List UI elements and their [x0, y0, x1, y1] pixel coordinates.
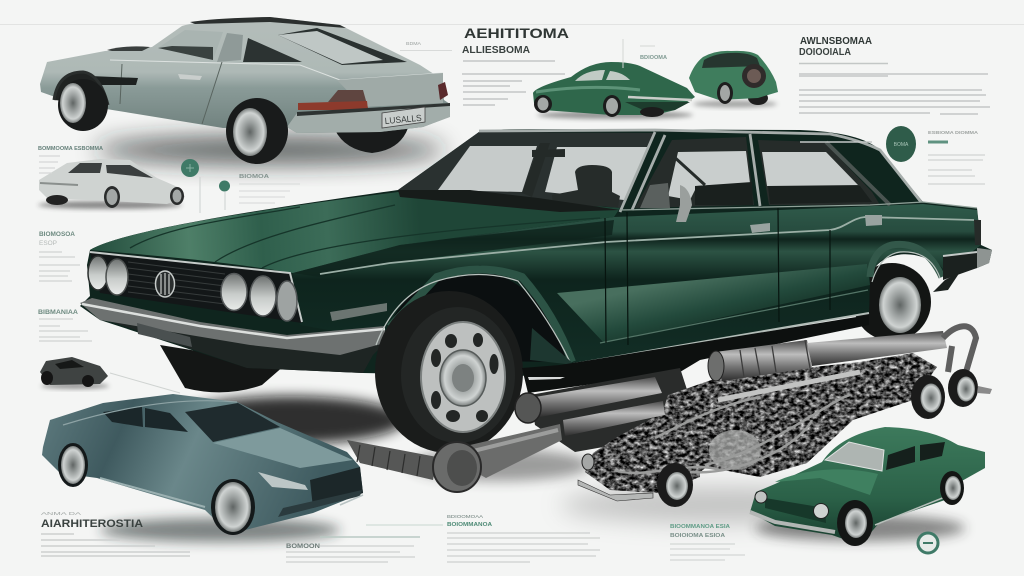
grille [90, 252, 302, 323]
wheels [54, 72, 108, 105]
sedan grille [310, 467, 363, 508]
mirror [676, 185, 692, 222]
door seams and handles [605, 208, 830, 345]
label block: right of badge [928, 130, 985, 184]
text block: bottom left [41, 534, 190, 556]
wheel arch [380, 270, 572, 362]
title: top centre [462, 26, 569, 56]
front bumper [80, 298, 385, 355]
silencer [715, 340, 812, 381]
text block: bottom centre: BOMOON [286, 543, 320, 550]
engine and exhaust assembly [347, 326, 992, 507]
oil pan [709, 430, 761, 470]
underbody [522, 315, 869, 393]
icon: green badge, small left [181, 159, 200, 213]
small label: top centre callout: BDIOOMA [640, 55, 667, 61]
label block: centre left [239, 174, 300, 203]
rear seats [695, 182, 872, 205]
front seat [552, 165, 620, 207]
text block: bottom right: BIOOMMANOA ESIA [670, 524, 730, 530]
lower left pipe [563, 401, 665, 436]
car: grey coupe, top left [40, 17, 450, 164]
title: bottom left: AIARHITEROSTIA [41, 518, 143, 530]
rear bumper [943, 252, 977, 280]
label block: left, white car [38, 146, 103, 173]
title: bottom left: ANMA DA [41, 511, 81, 516]
lower door panel [557, 264, 870, 343]
rear panel [337, 73, 443, 107]
lower trim line [600, 290, 868, 343]
grille top chrome strip [90, 252, 302, 322]
title: top right [799, 35, 872, 58]
upper left pipe [535, 377, 662, 417]
rear side window [758, 140, 880, 205]
under-fender panel [530, 328, 575, 365]
label block: left, lower [38, 310, 92, 341]
car: grey coupe, top left: LUSALLS [384, 113, 422, 126]
text block: bottom right: BOIOIOMA ESIOA [670, 533, 725, 539]
small label: top left [400, 41, 452, 50]
icon: green badge, right: BOMA [894, 142, 909, 148]
body silhouette [80, 129, 992, 376]
hood crease lines [130, 205, 600, 268]
sedan headlight [258, 472, 308, 490]
label block: left, lower: BIBMANIAA [38, 310, 79, 316]
chassis wheels [657, 463, 693, 507]
dash [398, 190, 620, 212]
title: bottom left [41, 511, 143, 530]
text block: bottom centre right [366, 514, 600, 562]
car: teal sedan, bottom left [42, 394, 363, 542]
quarter pillar [826, 142, 890, 205]
label block: left, white car: BOMMOOMA ESBOMMA [38, 146, 103, 152]
front rim [421, 322, 505, 432]
icon: green badge, smaller left [219, 180, 230, 210]
title: top centre: AEHITITOMA [464, 26, 569, 41]
mid pipe [718, 372, 860, 400]
text block: bottom centre right: BOIOMMANOA [447, 522, 492, 528]
hidden front wheel [160, 345, 285, 392]
ribbed tail pipe [347, 440, 437, 480]
label block: centre left: BIOMOA [239, 174, 270, 180]
fender top chrome line [320, 217, 974, 274]
main car: dark green sedan [80, 129, 992, 453]
text block: top centre [462, 61, 565, 105]
lower valance [100, 318, 385, 373]
sill chrome [573, 313, 869, 364]
icon: green badge, bottom right [918, 533, 938, 553]
label block: left, headlights: BIOMOSOA [39, 232, 76, 238]
label block: right of badge: ESBIOMA DIOMMA [928, 130, 979, 135]
title: top centre: ALLIESBOMA [462, 44, 530, 56]
car: green classic sedan, bottom right [750, 427, 985, 546]
small label: top centre callout [623, 39, 667, 68]
rear arch [870, 244, 942, 277]
rear plate [382, 107, 425, 128]
text block: bottom centre [286, 537, 420, 562]
car: white hatchback, left [38, 159, 185, 209]
title: top right: AWLNSBOMAA [800, 35, 872, 47]
ground shadows of main car [175, 396, 880, 523]
sill line under windows [620, 202, 977, 210]
hood [90, 192, 620, 273]
rear bumper [287, 103, 450, 133]
hood dark band [293, 220, 614, 277]
windscreen [398, 132, 655, 208]
rear wheel [853, 263, 931, 341]
text block: bottom right [670, 524, 745, 560]
title: top right: DOIOOIALA [799, 46, 851, 58]
body side panel [293, 204, 981, 363]
car: green rear view, top centre [689, 51, 778, 108]
front side window [635, 137, 754, 208]
number plate recess [137, 323, 192, 347]
text block: bottom centre right: BDIOOMOAA [447, 514, 483, 519]
rear view mirror [522, 143, 565, 197]
side badge [330, 303, 387, 321]
icon: green badge, right [886, 126, 916, 162]
manifold [943, 326, 976, 372]
small label: top left: BDMA [406, 41, 421, 46]
window pillars and roof trim [479, 130, 921, 212]
headlights [88, 256, 108, 290]
label block: left, headlights: ESOP [39, 241, 57, 247]
car: small dark model, left [40, 357, 109, 389]
text block: top right [799, 64, 990, 142]
taillight [974, 220, 981, 245]
tubes [615, 395, 850, 473]
label block: left, headlights [39, 232, 80, 281]
engine mass [640, 353, 937, 477]
end cap [433, 442, 481, 492]
chassis bumper [578, 480, 653, 501]
car: green coupe, top centre [533, 62, 695, 119]
thin callout line, small model [110, 373, 180, 393]
grille emblem [156, 271, 174, 297]
tail lights [328, 90, 368, 108]
lower chassis front [585, 407, 700, 493]
front tyre [375, 291, 523, 453]
dark backing behind pipes [530, 368, 700, 452]
upper pipe [807, 331, 947, 366]
